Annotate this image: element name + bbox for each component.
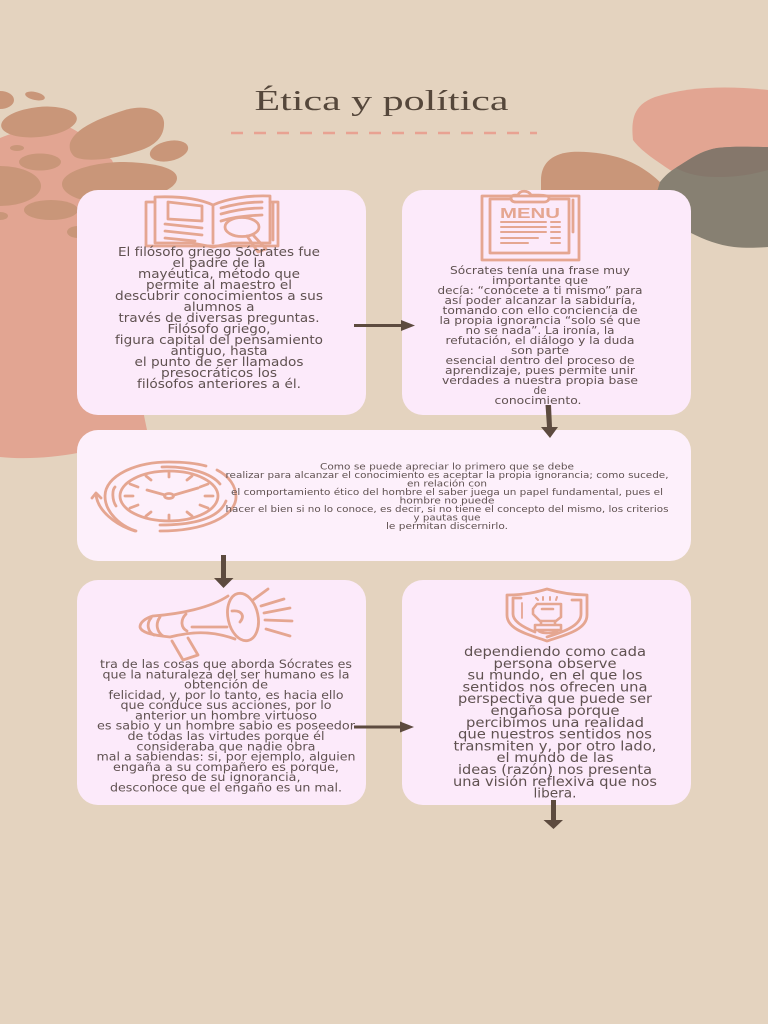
text: paragraph 2: aprendizaje, pues permite unir: [445, 364, 636, 377]
arrow: panel 4 to panel 5: [354, 722, 414, 732]
text: paragraph 1: el punto de ser llamados: [134, 355, 304, 369]
text: paragraph 1: alumnos a: [184, 300, 254, 314]
text: paragraph 4: obtención de: [184, 678, 268, 692]
text: paragraph 2: son parte: [511, 344, 569, 357]
text: paragraph 4: de todas las virtudes porque él: [128, 729, 324, 743]
panel: naturaleza del ser humano: [77, 580, 366, 805]
text: paragraph 1: descubrir conocimientos a sus: [115, 289, 323, 303]
text: paragraph 4: mal a sabiendas: si, por ejemplo, alguien: [96, 750, 356, 764]
text: paragraph 1: el padre de la: [172, 256, 266, 270]
text: paragraph 5: su mundo, en el que los: [468, 669, 643, 684]
text: paragraph 4: [96, 657, 356, 794]
text: paragraph 4: que la naturaleza del ser humano es la: [102, 667, 350, 681]
icon: open book with magnifier: [146, 196, 278, 252]
text: paragraph 2: importante que: [492, 274, 588, 287]
icon label: MENU: MENU: [500, 205, 560, 222]
text: paragraph 3: [226, 462, 669, 532]
icon: clock with circular arrow: [92, 462, 236, 531]
text: paragraph 5: sentidos nos ofrecen una: [462, 680, 648, 695]
text: paragraph 1: El filósofo griego Sócrates fue: [118, 245, 320, 259]
text: paragraph 4: preso de su ignorancia,: [152, 770, 300, 784]
text: paragraph 1: mayéutica, método que: [138, 267, 300, 281]
text: paragraph 5: perspectiva que puede ser: [458, 692, 653, 707]
text: paragraph 1: antiguo, hasta: [170, 344, 268, 358]
text: paragraph 2: así poder alcanzar la sabiduría,: [444, 294, 636, 307]
text: paragraph 4: que conduce sus acciones, por lo: [120, 698, 332, 712]
panel: mundo de los sentidos y de las ideas: [402, 580, 691, 805]
text: paragraph 5: engañosa porque: [490, 704, 620, 719]
arrow: panel 3 to panel 4: [214, 555, 234, 588]
arrow: panel 5 downward: [544, 800, 563, 829]
text: paragraph 2: la propia ignorancia “solo sé que: [440, 314, 641, 327]
text: paragraph 4: felicidad, y, por lo tanto, es hacia ello: [108, 688, 344, 702]
icon: clipboard menu: [482, 191, 579, 260]
panel: conócete a ti mismo: [402, 190, 691, 415]
text: paragraph 5: el mundo de las: [496, 751, 614, 766]
text: paragraph 2: tomando con ello conciencia de: [442, 304, 638, 317]
text: paragraph 4: consideraba que nadie obra: [136, 739, 316, 753]
text: paragraph 1: figura capital del pensamiento: [115, 333, 323, 347]
text: paragraph 1: presocráticos los: [161, 366, 277, 380]
text: paragraph 5: que nuestros sentidos nos: [458, 728, 652, 743]
text: paragraph 1: permite al maestro el: [146, 278, 292, 292]
text: paragraph 5: transmiten y, por otro lado,: [454, 739, 656, 754]
text: paragraph 2: decía: “conócete a ti mismo” para: [438, 284, 642, 297]
text: paragraph 1: través de diversas preguntas.: [118, 311, 320, 325]
dashed title underline: [231, 132, 537, 134]
arrow: panel 1 to panel 2: [354, 320, 415, 331]
text: paragraph 4: tra de las cosas que aborda Sócrates es: [100, 657, 352, 671]
text: paragraph 3: Como se puede apreciar lo primero que se debe: [320, 462, 575, 472]
text: paragraph 4: es sabio y un hombre sabio es poseedor: [97, 719, 355, 733]
text: paragraph 2: no se nada”. La ironía, la: [466, 324, 614, 337]
decorative blobs: top left: [0, 90, 190, 458]
text: paragraph 2: verdades a nuestra propia base: [442, 374, 638, 387]
icon: shield with raised fist: [507, 589, 587, 641]
panel: Sócrates y la mayéutica: [77, 190, 366, 415]
arrow: panel 2 to panel 3: [541, 405, 558, 438]
text: paragraph 2: refutación, el diálogo y la duda: [446, 334, 634, 347]
text: paragraph 5: dependiendo como cada: [464, 645, 646, 660]
text: paragraph 3: en relación con: [407, 478, 487, 490]
text: paragraph 4: engaña a su compañero es porque,: [113, 760, 339, 774]
text: paragraph 5: libera.: [534, 787, 576, 802]
text: paragraph 4: anterior un hombre virtuoso: [135, 708, 317, 722]
text: paragraph 5: percibimos una realidad: [466, 716, 644, 731]
text: paragraph 1: [115, 245, 323, 391]
text: paragraph 2: conocimiento.: [494, 394, 582, 407]
panel: la propia ignorancia: [77, 430, 691, 561]
text: paragraph 3: hombre no puede: [400, 496, 495, 506]
title: Ética y política: [254, 86, 509, 117]
text: paragraph 1: Filósofo griego,: [168, 322, 270, 336]
text: paragraph 1: filósofos anteriores a él.: [137, 377, 301, 391]
text: paragraph 2: [438, 264, 642, 407]
text: paragraph 2: de: [534, 384, 547, 397]
text: paragraph 5: [453, 645, 657, 802]
text: paragraph 3: y pautas que: [414, 514, 481, 524]
decorative blobs: top right: [541, 88, 768, 248]
text: paragraph 5: una visión reflexiva que nos: [453, 775, 657, 790]
text: paragraph 3: hacer el bien si no lo conoce, es decir, si no tiene el concepto del mismo, los criterios: [226, 505, 669, 515]
text: paragraph 3: le permitan discernirlo.: [386, 522, 508, 532]
text: paragraph 3: realizar para alcanzar el conocimiento es aceptar la propia ignorancia; como sucede,: [226, 471, 668, 481]
text: paragraph 3: el comportamiento ético del hombre el saber juega un papel fundamental, pues el: [231, 487, 663, 498]
text: paragraph 4: desconoce que el engaño es un mal.: [110, 780, 342, 794]
text: paragraph 5: ideas (razón) nos presenta: [458, 763, 652, 778]
text: paragraph 5: persona observe: [494, 657, 617, 672]
icon: megaphone: [140, 589, 292, 660]
text: paragraph 2: esencial dentro del proceso de: [446, 354, 635, 367]
text: paragraph 2: Sócrates tenía una frase muy: [450, 264, 631, 277]
